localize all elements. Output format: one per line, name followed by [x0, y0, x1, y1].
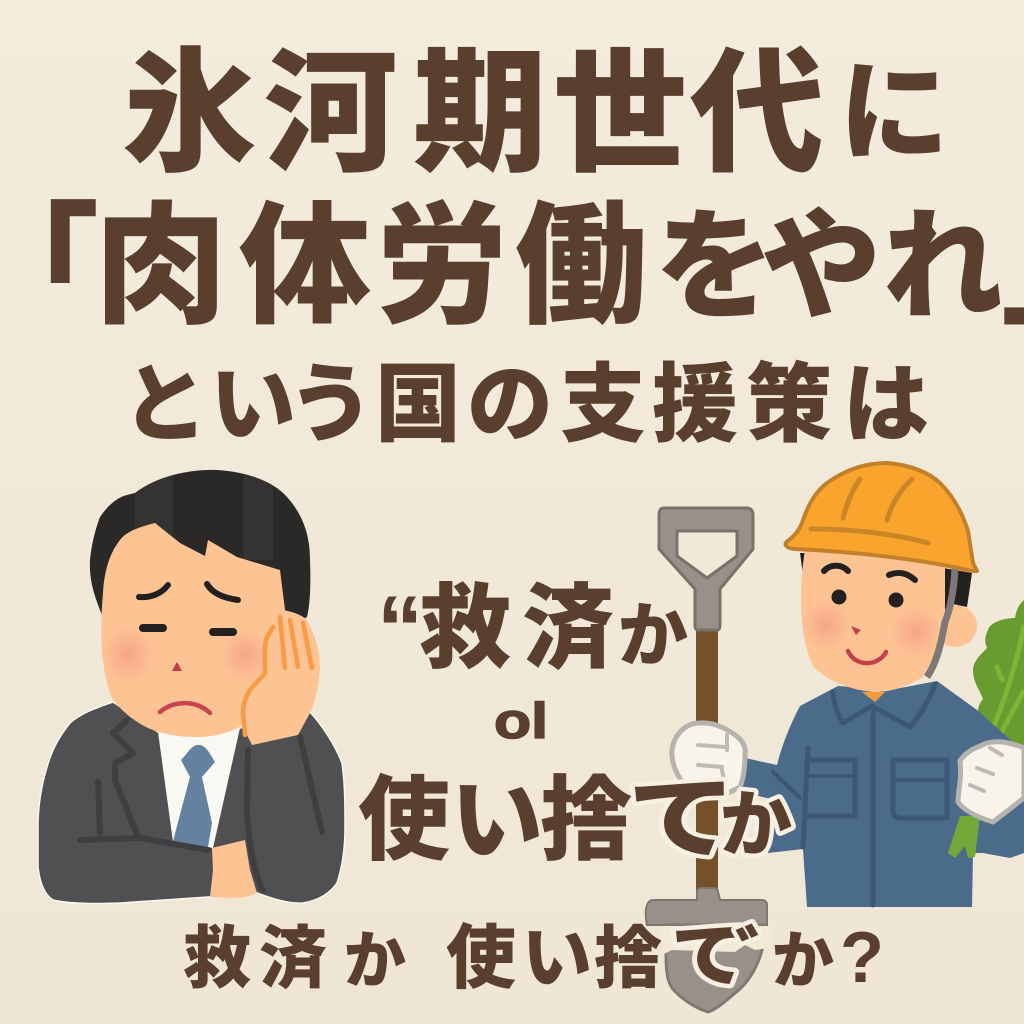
finger lines: [243, 617, 312, 735]
hand on cheek: [241, 610, 320, 745]
jacket details: [773, 684, 947, 905]
shovel neck and plate: [646, 888, 767, 925]
cheeks: [802, 599, 850, 651]
hair: [90, 470, 310, 618]
bottom text: te over shovel: て: [671, 917, 749, 995]
collar v-neck: [862, 692, 885, 702]
bottom text: dakuten: ゛: [735, 921, 803, 997]
ear: [933, 605, 977, 647]
lower hand: [210, 840, 257, 898]
face details: [824, 566, 915, 663]
tie: [173, 745, 215, 847]
title line 1: に: [839, 52, 949, 175]
bottom text: disposable: 捨: [594, 921, 662, 997]
title line 3: という国の支援策は: [122, 357, 929, 453]
greens bundle: [973, 600, 1024, 760]
mouth: [160, 703, 210, 713]
bottom text: disposable: 使: [446, 919, 516, 997]
centre question: disposable: [358, 769, 792, 872]
centre question: rescue: か: [618, 597, 688, 675]
bottom text: ka question: ?: [840, 918, 884, 998]
text halo band across blade: [662, 926, 770, 955]
shovel blade: [666, 925, 766, 1012]
illustration: shovel: [646, 508, 770, 1012]
helmet strap: [927, 568, 955, 677]
hard hat: [786, 463, 977, 571]
greens stalks over jacket: [948, 816, 980, 858]
centre connector: or: ol: [494, 693, 548, 749]
halo text ka: か: [720, 786, 792, 866]
hard hat ridges: [811, 479, 928, 543]
centre question: rescue: “救済: [377, 578, 614, 680]
title line 2: をやれ: [655, 200, 1003, 334]
bottom text: rescue: か: [344, 927, 406, 996]
halo text te: て: [628, 769, 736, 870]
shovel shaft: [696, 620, 718, 892]
right glove: [958, 742, 1024, 822]
cheek blush: [102, 625, 154, 685]
shovel handle: [659, 508, 753, 630]
illustration: construction worker: [672, 463, 1024, 907]
work jacket: [738, 681, 1024, 907]
title line 1: 氷河期世代: [122, 40, 824, 189]
illustration: worried office worker: [38, 460, 345, 904]
bottom question: [183, 917, 884, 998]
bottom text: disposable: い: [522, 919, 592, 997]
bottom text: ka question: か: [772, 927, 834, 996]
face: [101, 523, 285, 737]
shirt: [158, 728, 240, 848]
hair: [800, 553, 972, 618]
eyebrows and closed eyes: [139, 584, 238, 632]
suit body: [38, 702, 345, 904]
main word: 使い捨: [358, 770, 632, 872]
left glove: [672, 723, 745, 798]
nose: [172, 662, 182, 671]
face: [801, 550, 945, 692]
suit folds: [80, 720, 322, 890]
bottom text: rescue: 救済: [183, 921, 327, 997]
